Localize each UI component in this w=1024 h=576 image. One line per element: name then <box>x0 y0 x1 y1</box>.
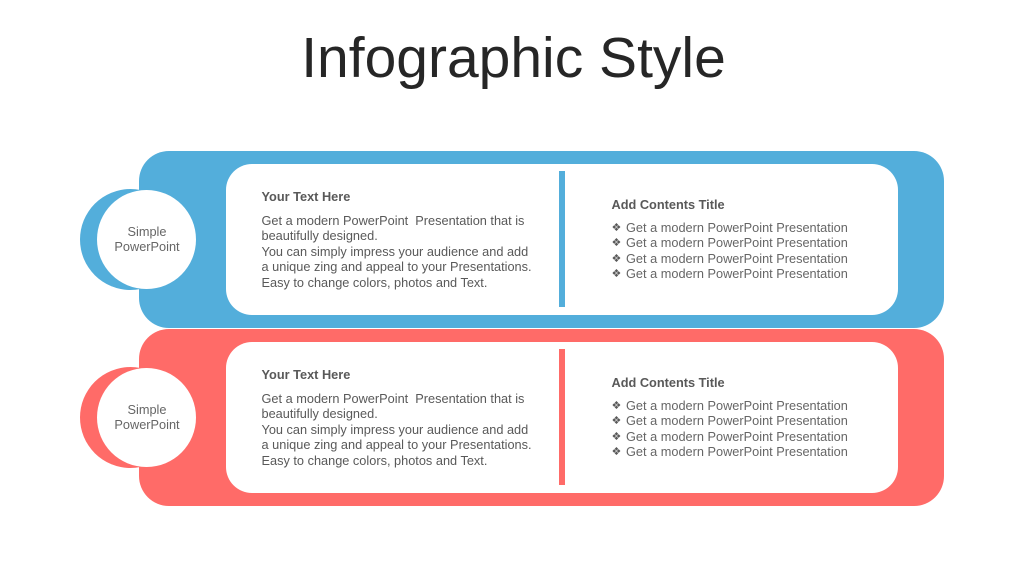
circle label: Simple PowerPoint <box>97 190 196 289</box>
bullet list: ❖ <box>612 445 621 458</box>
text block: description: You can simply impress your audience and add <box>262 244 528 259</box>
heading: Your Text Here: Your Text Here <box>262 367 350 382</box>
text block: description <box>262 391 532 468</box>
text block: description: You can simply impress your audience and add <box>262 422 528 437</box>
text block: description: Get a modern PowerPoint Presentation that is <box>262 391 524 406</box>
bullet list <box>612 220 848 281</box>
text block: description: a unique zing and appeal to your Presentations. <box>262 437 532 452</box>
bullet list: ❖ <box>612 267 621 280</box>
bullet list: ❖ <box>612 221 621 234</box>
bullet list: Get a modern PowerPoint Presentation <box>626 220 848 235</box>
text block: description: Easy to change colors, photos and Text. <box>262 275 487 290</box>
red crescent circle <box>80 367 181 468</box>
text block: description: a unique zing and appeal to your Presentations. <box>262 259 532 274</box>
text block: description: Get a modern PowerPoint Presentation that is <box>262 213 524 228</box>
red rounded background <box>139 329 944 506</box>
bullet list: ❖ <box>612 252 621 265</box>
text block: description: Easy to change colors, photos and Text. <box>262 453 487 468</box>
circle label: Simple PowerPoint: PowerPoint <box>114 239 180 254</box>
bullet list: Get a modern PowerPoint Presentation <box>626 235 848 250</box>
bullet list: Get a modern PowerPoint Presentation <box>626 429 848 444</box>
circle label: Simple PowerPoint: PowerPoint <box>114 417 180 432</box>
text block: description: beautifully designed. <box>262 406 378 421</box>
bullet list: Get a modern PowerPoint Presentation <box>626 251 848 266</box>
bullet list: ❖ <box>612 414 621 427</box>
panel: blue row <box>80 151 944 328</box>
circle label: Simple PowerPoint: Simple <box>128 402 166 417</box>
heading: Add Contents Title: Add Contents Title <box>612 375 725 390</box>
red vertical divider <box>559 349 565 485</box>
text block: description <box>262 213 532 290</box>
circle label: Simple PowerPoint: Simple <box>128 224 166 239</box>
bullet list <box>612 398 848 459</box>
bullet list: Get a modern PowerPoint Presentation <box>626 413 848 428</box>
circle label: Simple PowerPoint <box>97 368 196 467</box>
bullet list: Get a modern PowerPoint Presentation <box>626 266 848 281</box>
panel: red row <box>80 329 944 506</box>
title: Infographic Style <box>301 26 726 90</box>
heading: Add Contents Title: Add Contents Title <box>612 197 725 212</box>
heading: Your Text Here: Your Text Here <box>262 189 350 204</box>
bullet list: Get a modern PowerPoint Presentation <box>626 444 848 459</box>
bullet list: ❖ <box>612 430 621 443</box>
bullet list: ❖ <box>612 236 621 249</box>
blue vertical divider <box>559 171 565 307</box>
text block: description: beautifully designed. <box>262 228 378 243</box>
blue crescent circle <box>80 189 181 290</box>
blue rounded background <box>139 151 944 328</box>
bullet list: ❖ <box>612 399 621 412</box>
white card <box>226 164 898 315</box>
white card <box>226 342 898 493</box>
bullet list: Get a modern PowerPoint Presentation <box>626 398 848 413</box>
